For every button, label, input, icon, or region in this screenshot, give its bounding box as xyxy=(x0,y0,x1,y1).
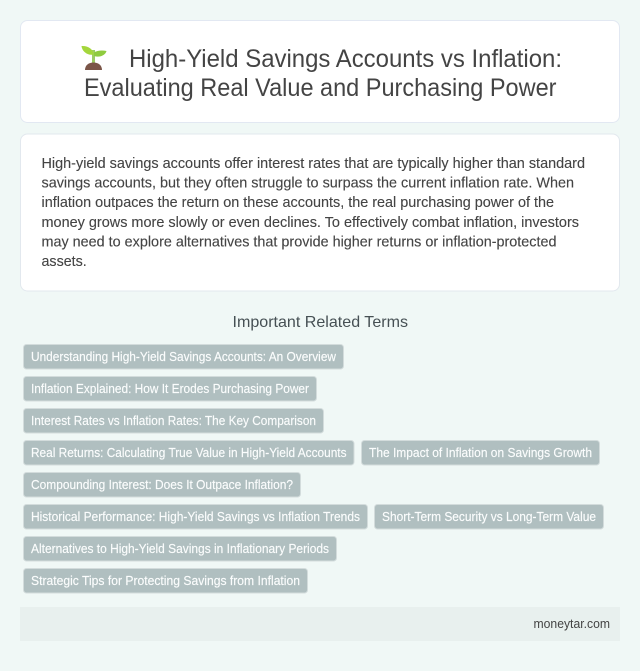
tag: short-term security: Short-Term Security vs Long-Term Value xyxy=(382,510,596,524)
tag: inflation explained xyxy=(24,376,316,401)
description text: may need to explore alternatives that provide higher returns or inflation-protected xyxy=(42,234,556,250)
icon: sprout xyxy=(82,46,106,70)
tag: compounding interest: Compounding Interest: Does It Outpace Inflation? xyxy=(31,478,293,492)
tag: interest rates vs inflation rates xyxy=(24,408,324,433)
tag: real returns xyxy=(24,440,354,465)
heading: important related terms: Important Related Terms xyxy=(232,314,408,331)
tag: impact of inflation: The Impact of Inflation on Savings Growth xyxy=(369,446,592,460)
description text: money grows more slowly or even declines. To effectively combat inflation, investors xyxy=(42,215,579,231)
panel: description card xyxy=(20,134,620,291)
tag: understanding high-yield savings xyxy=(24,344,344,369)
tag: impact of inflation xyxy=(362,440,600,465)
tag: compounding interest xyxy=(24,472,300,497)
tag list xyxy=(24,344,604,593)
tag: alternatives xyxy=(24,536,336,561)
description text: assets. xyxy=(42,254,87,270)
title text: Evaluating Real Value and Purchasing Power xyxy=(84,74,556,102)
description text: High-yield savings accounts offer interest rates that are typically higher than standard xyxy=(42,156,585,172)
description text: inflation outpaces the return on these accounts, the real purchasing power of the xyxy=(42,195,554,211)
tag: alternatives: Alternatives to High-Yield Savings in Inflationary Periods xyxy=(31,542,329,556)
tag: historical performance xyxy=(24,504,368,529)
tag: understanding high-yield savings: Understanding High-Yield Savings Accounts: An Overview xyxy=(31,350,337,364)
title text xyxy=(84,45,562,102)
tag: strategic tips xyxy=(24,568,308,593)
tag: historical performance: Historical Performance: High-Yield Savings vs Inflation Trends xyxy=(31,510,360,524)
panel: title card xyxy=(20,20,620,122)
title text: High-Yield Savings Accounts vs Inflation: xyxy=(129,45,562,73)
tag: inflation explained: Inflation Explained: How It Erodes Purchasing Power xyxy=(31,382,309,396)
tag: strategic tips: Strategic Tips for Protecting Savings from Inflation xyxy=(31,574,300,588)
tag: interest rates vs inflation rates: Interest Rates vs Inflation Rates: The Key Comparison xyxy=(31,414,316,428)
footer site name: moneytar.com xyxy=(534,616,610,631)
tag: short-term security xyxy=(374,504,604,529)
footer bar xyxy=(20,607,620,641)
description text: savings accounts, but they often struggle to surpass the current inflation rate. When xyxy=(42,176,574,192)
tag: real returns: Real Returns: Calculating True Value in High-Yield Accounts xyxy=(31,446,346,460)
description text xyxy=(42,156,585,270)
